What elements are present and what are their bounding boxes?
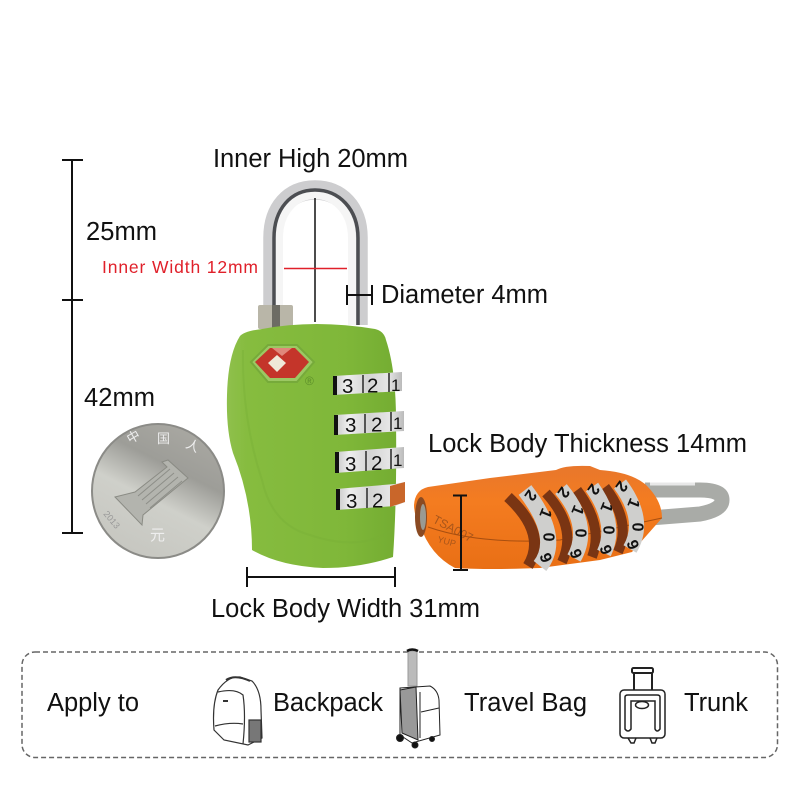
icon: backpack <box>214 677 262 745</box>
orange lock dial digits: 9 <box>595 543 615 557</box>
combination dial rows: 1 <box>391 376 400 395</box>
orange lock dial digits: 0 <box>628 522 646 532</box>
combination dial rows <box>333 372 405 513</box>
green lock body <box>227 324 405 568</box>
coin: 2013 <box>101 509 122 531</box>
coin: 元 <box>150 527 165 544</box>
diameter label: Diameter 4mm <box>381 281 548 309</box>
inner width label: Inner Width 12mm <box>102 257 258 277</box>
orange lock dial digits: 1 <box>623 496 643 510</box>
coin <box>92 424 224 558</box>
travel bag label: Travel Bag <box>464 689 587 717</box>
registered mark: ® <box>305 374 314 388</box>
inner height title: Inner High 20mm <box>213 145 408 173</box>
combination dial rows: 2 <box>371 414 382 436</box>
orange lock dial digits: 9 <box>622 538 642 552</box>
orange lock body: YUP <box>436 534 457 549</box>
TSA diamond logo <box>251 345 314 382</box>
body width marker <box>247 567 395 587</box>
orange lock dial digits: 0 <box>599 525 617 535</box>
orange lock dial digits: 0 <box>571 528 589 538</box>
total height measure line <box>62 160 83 534</box>
combination dial rows: 3 <box>342 375 353 398</box>
orange lock dial digits: 0 <box>539 532 557 542</box>
orange lock dial digits: 2 <box>520 486 540 504</box>
orange lock body: TSA007 <box>431 512 476 545</box>
orange lock dial digits: 9 <box>565 547 585 561</box>
orange lock body <box>414 466 662 569</box>
icon: travel bag <box>396 650 440 748</box>
combination dial rows: 1 <box>393 451 402 470</box>
combination dial rows: 3 <box>345 453 356 476</box>
42mm label: 42mm <box>84 384 155 412</box>
combination dial rows: 1 <box>393 414 402 433</box>
combination dial rows: 2 <box>367 374 378 398</box>
orange lock dial rings <box>508 484 637 566</box>
orange lock dial digits: 2 <box>611 477 631 495</box>
inner height line <box>314 198 316 322</box>
icon: trunk <box>620 668 665 743</box>
diameter marker <box>347 285 372 305</box>
orange lock shackle <box>645 484 722 518</box>
combination dial rows: 3 <box>345 414 356 437</box>
inner width line <box>284 268 347 270</box>
coin: 中 <box>124 427 143 447</box>
body width label: Lock Body Width 31mm <box>211 595 480 623</box>
combination dial rows: 2 <box>372 490 383 512</box>
orange lock dial digits: 1 <box>567 503 587 517</box>
orange lock dial digits: 9 <box>535 551 555 565</box>
25mm label: 25mm <box>86 218 157 246</box>
apply to label: Apply to <box>47 689 139 717</box>
thickness marker <box>453 495 468 570</box>
coin: 人 <box>184 436 202 455</box>
coin: 国 <box>157 431 170 446</box>
shackle of green lock <box>258 190 358 329</box>
orange lock dial digits <box>520 477 646 565</box>
orange lock dial digits: 1 <box>596 500 616 514</box>
orange lock dial digits: 1 <box>535 506 555 520</box>
combination dial rows: 2 <box>371 452 382 475</box>
thickness label: Lock Body Thickness 14mm <box>428 430 747 458</box>
backpack label: Backpack <box>273 689 383 717</box>
orange lock dial digits: 2 <box>553 483 573 501</box>
trunk label: Trunk <box>684 689 748 717</box>
panel: apply to <box>22 650 778 758</box>
orange lock dial digits: 2 <box>583 480 603 498</box>
combination dial rows: 3 <box>346 490 357 513</box>
